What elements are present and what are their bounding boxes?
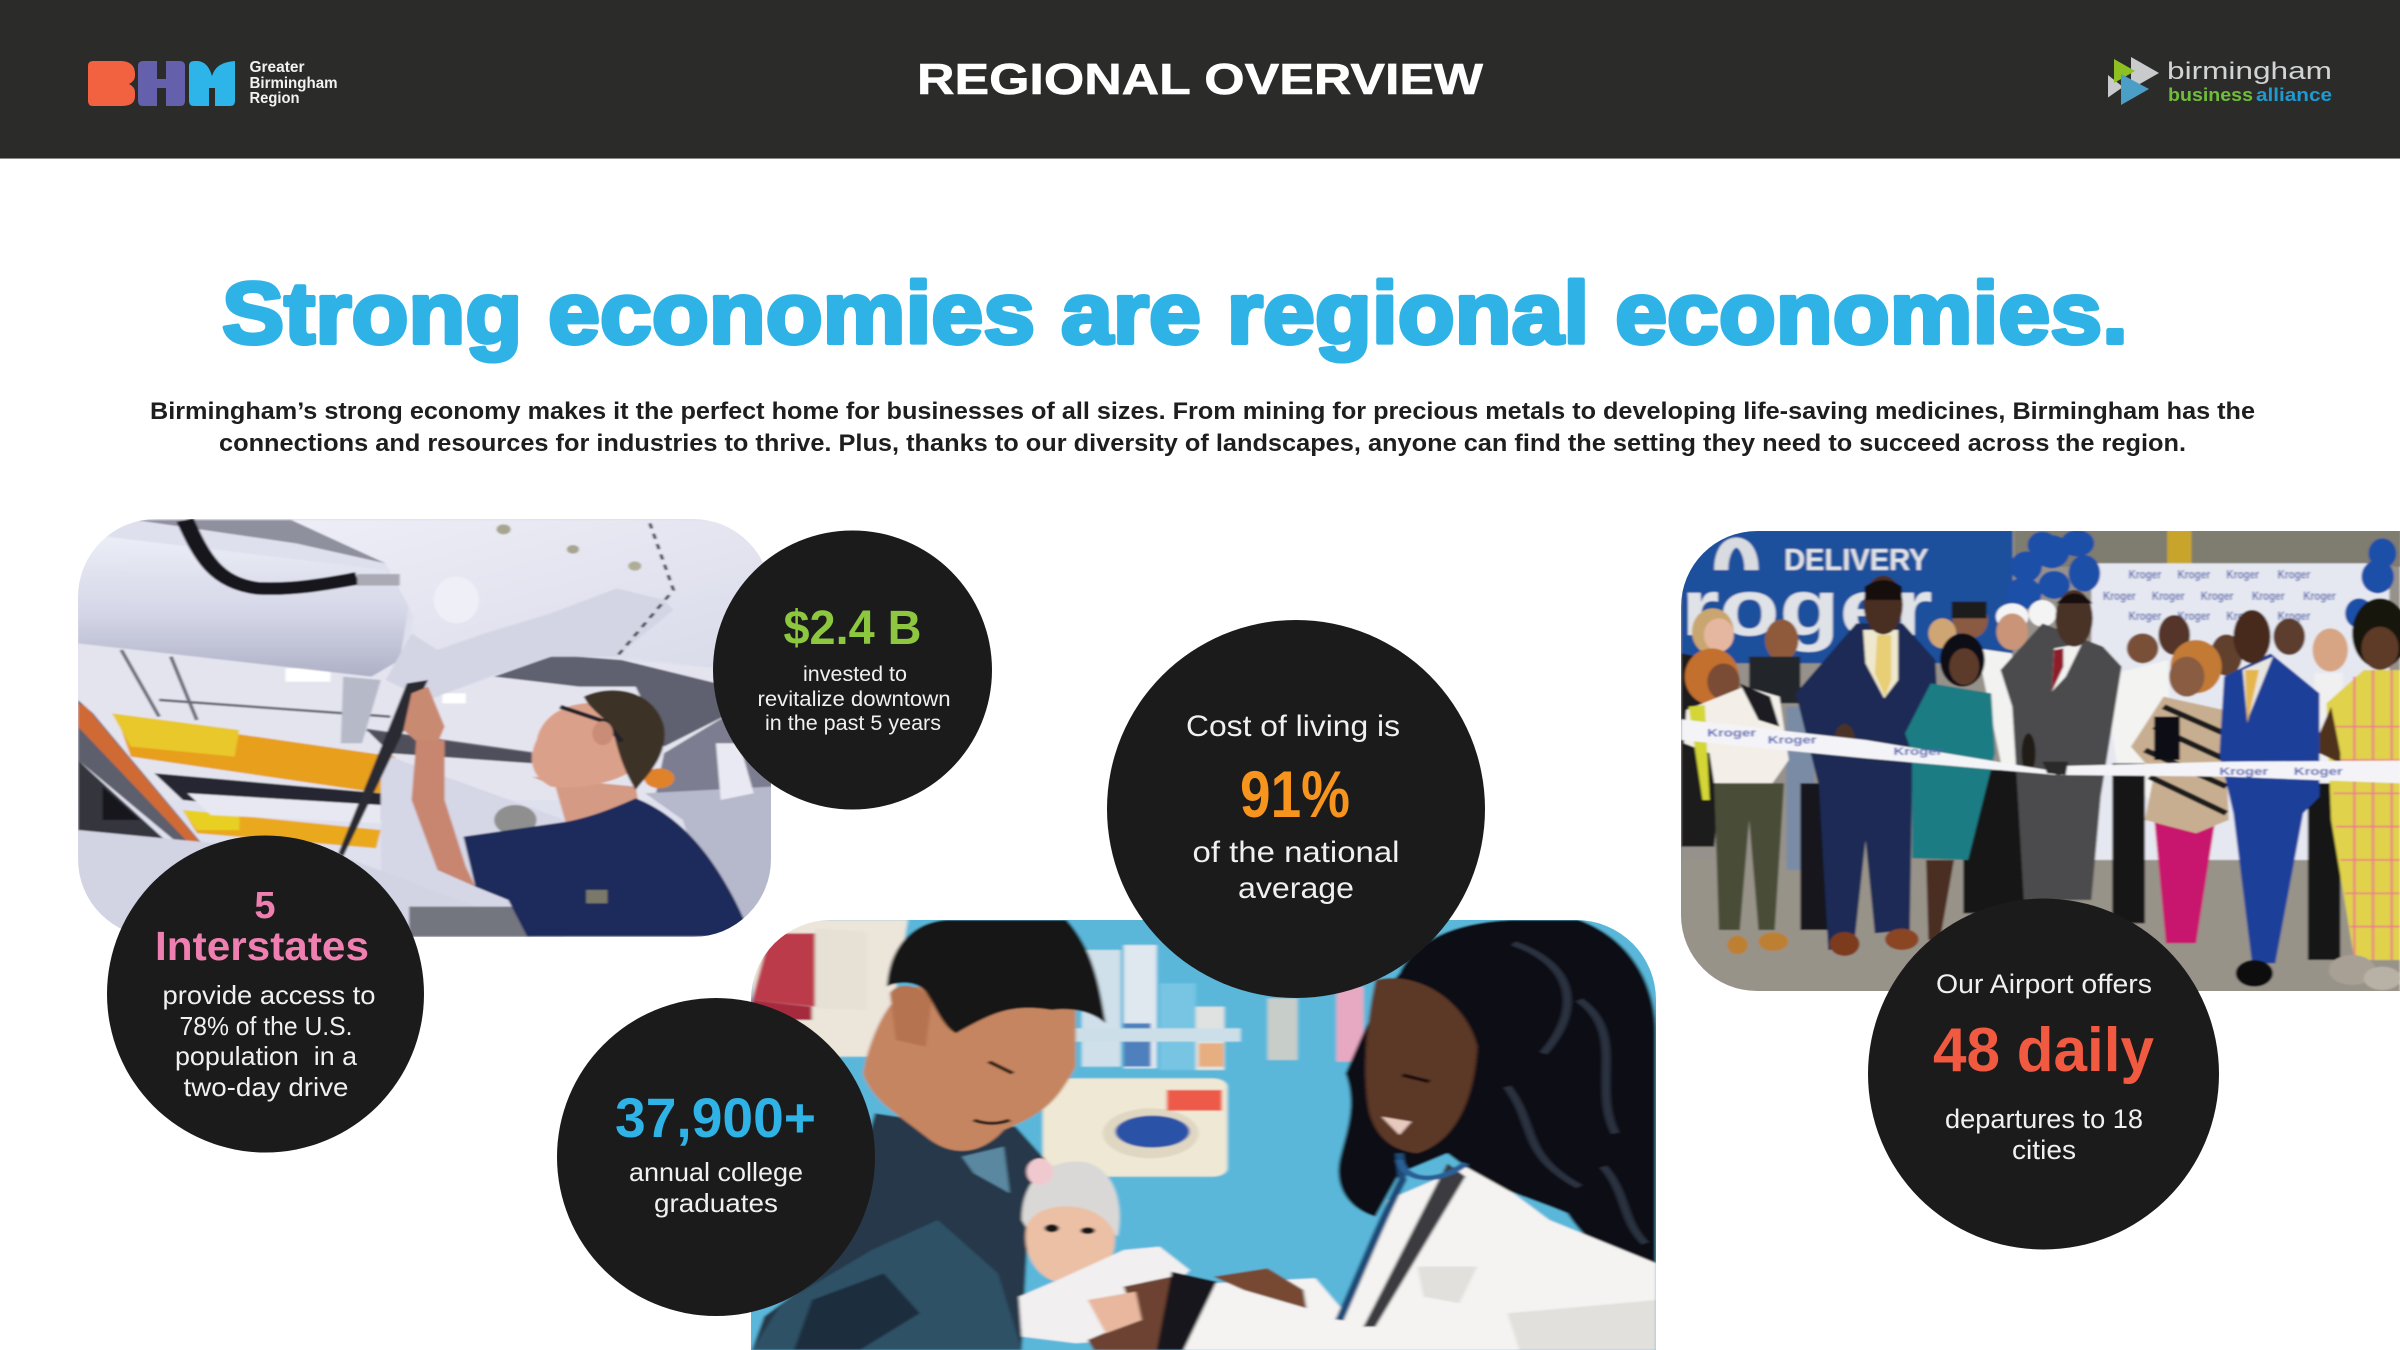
stat circle: 2.4 billion invested: $2.4 B <box>784 602 922 655</box>
stat circle: cost of living: of the national <box>1192 836 1400 869</box>
ribbon: Kroger <box>2294 765 2343 777</box>
doctor coat <box>1184 1167 1656 1350</box>
photo: technician working on machinery <box>60 513 800 947</box>
ribbon: Kroger <box>1707 727 1756 739</box>
logo backdrop: Kroger <box>2129 568 2161 582</box>
logo backdrop: Kroger <box>2226 568 2259 582</box>
logo backdrop: Kroger <box>2178 568 2210 582</box>
woman in teal dress <box>1905 633 1995 940</box>
logo backdrop: Kroger <box>2303 590 2336 603</box>
logo: Birmingham Business Alliance: business <box>2168 84 2253 105</box>
doctor face <box>1366 978 1477 1153</box>
blue kroger wall: DELIVERY <box>1784 542 1929 577</box>
logo: Birmingham Business Alliance <box>2108 57 2332 105</box>
hands and sleeve <box>1214 1268 1307 1308</box>
man in navy suit <box>1796 576 1940 956</box>
ribbon: Kroger <box>1893 745 1942 757</box>
woman in yellow dress <box>2320 598 2400 990</box>
stat circle: cost of living: Cost of living is <box>1186 710 1400 743</box>
floor <box>2247 962 2258 985</box>
stat circle: airport departures: Our Airport offers <box>1936 969 2152 999</box>
baby <box>1022 1162 1120 1237</box>
header bar <box>0 0 2400 159</box>
stat circle: airport departures: departures to 18 <box>1945 1104 2143 1134</box>
stat circle: college graduates: annual college <box>629 1157 803 1187</box>
stat circle: college graduates <box>557 998 875 1316</box>
dark beam on the left <box>78 700 202 843</box>
woman in zebra jacket <box>2131 640 2229 943</box>
stat circle: 2.4 billion invested: in the past 5 years <box>765 711 941 735</box>
logo backdrop: Kroger <box>2252 590 2285 603</box>
logo backdrop: Kroger <box>2103 590 2136 603</box>
logo: Greater Birmingham Region: Birmingham <box>250 75 338 92</box>
logo: Greater Birmingham Region: Region <box>250 90 300 107</box>
stat circle: cost of living: average <box>1238 872 1354 905</box>
intro paragraph: Birmingham’s strong economy makes it the perfect home for businesses of all sizes. From mining for precious metals to developing life-saving medicines, Birmingham has the <box>150 398 2255 425</box>
navy shirt <box>463 798 744 937</box>
father <box>752 1113 1046 1350</box>
logo backdrop: Kroger <box>2129 610 2161 623</box>
photo: doctor with father and baby <box>740 917 1680 1350</box>
stat circle: 5 interstates: 5 <box>254 885 276 927</box>
stat circle: airport departures: 48 daily <box>1933 1016 2154 1085</box>
stat circle: cost of living: 91% <box>1240 757 1350 831</box>
logo backdrop: Kroger <box>2152 590 2185 603</box>
balloons <box>2006 530 2396 628</box>
intro paragraph: connections and resources for industries to thrive. Plus, thanks to our diversity of landscapes, anyone can find the setting they need to succeed across the region. <box>219 430 2186 457</box>
ribbon <box>1681 719 2400 783</box>
man in grey suit <box>2001 590 2122 900</box>
logo: Greater Birmingham Region: Greater <box>250 59 304 76</box>
logo: Birmingham Business Alliance: alliance <box>2256 84 2332 105</box>
ribbon: Kroger <box>1768 733 1817 746</box>
ribbon: Kroger <box>2219 765 2268 777</box>
logo backdrop: Kroger <box>2278 568 2310 582</box>
man in blue suit <box>2219 610 2320 987</box>
ceiling <box>78 643 773 800</box>
stat circle: college graduates: graduates <box>654 1188 778 1218</box>
head <box>532 703 636 787</box>
stat circle: cost of living <box>1107 620 1485 998</box>
stat circle: 5 interstates: provide access to <box>162 980 376 1010</box>
stat circle: 2.4 billion invested: revitalize downtown <box>758 687 950 711</box>
stat circle: 5 interstates: population in a <box>175 1041 358 1071</box>
neck <box>532 776 639 823</box>
cylinder <box>78 533 409 677</box>
stat circle: 2.4 billion invested <box>713 530 992 810</box>
logo backdrop: Kroger <box>2226 610 2259 623</box>
stat circle: 5 interstates: two-day drive <box>184 1072 348 1102</box>
blue kroger wall <box>1681 530 2013 663</box>
logo: Greater Birmingham Region <box>88 59 338 107</box>
background people <box>1681 602 2348 960</box>
stat circle: 5 interstates <box>107 836 424 1152</box>
shelf and items <box>1076 945 1241 1070</box>
logo backdrop: Kroger <box>2278 610 2310 623</box>
logo backdrop <box>2091 563 2389 860</box>
stat circle: airport departures: cities <box>2012 1135 2076 1165</box>
woman in vest <box>1684 648 1789 954</box>
sharps box <box>1043 1078 1227 1177</box>
stat circle: 2.4 billion invested: invested to <box>803 662 907 686</box>
stat circle: 5 interstates: Interstates <box>155 923 369 969</box>
header title: REGIONAL OVERVIEW <box>917 55 1484 104</box>
stat circle: college graduates: 37,900+ <box>615 1086 816 1149</box>
logo backdrop: Kroger <box>2178 610 2210 623</box>
logo backdrop: Kroger <box>2201 590 2234 603</box>
photo: ribbon cutting ceremony <box>1670 530 2400 997</box>
stat circle: 5 interstates: 78% of the U.S. <box>180 1011 352 1041</box>
blue kroger wall: roger <box>1681 563 1933 652</box>
glove and arm <box>404 687 445 743</box>
logo: Birmingham Business Alliance: birmingham <box>2167 58 2332 85</box>
stat circle: airport departures <box>1868 898 2219 1250</box>
main heading: Strong economies are regional economies. <box>222 265 2128 362</box>
doctor hair <box>1338 920 1656 1267</box>
intro paragraph <box>150 398 2255 457</box>
bracket <box>294 520 559 604</box>
lower equipment <box>378 756 564 906</box>
